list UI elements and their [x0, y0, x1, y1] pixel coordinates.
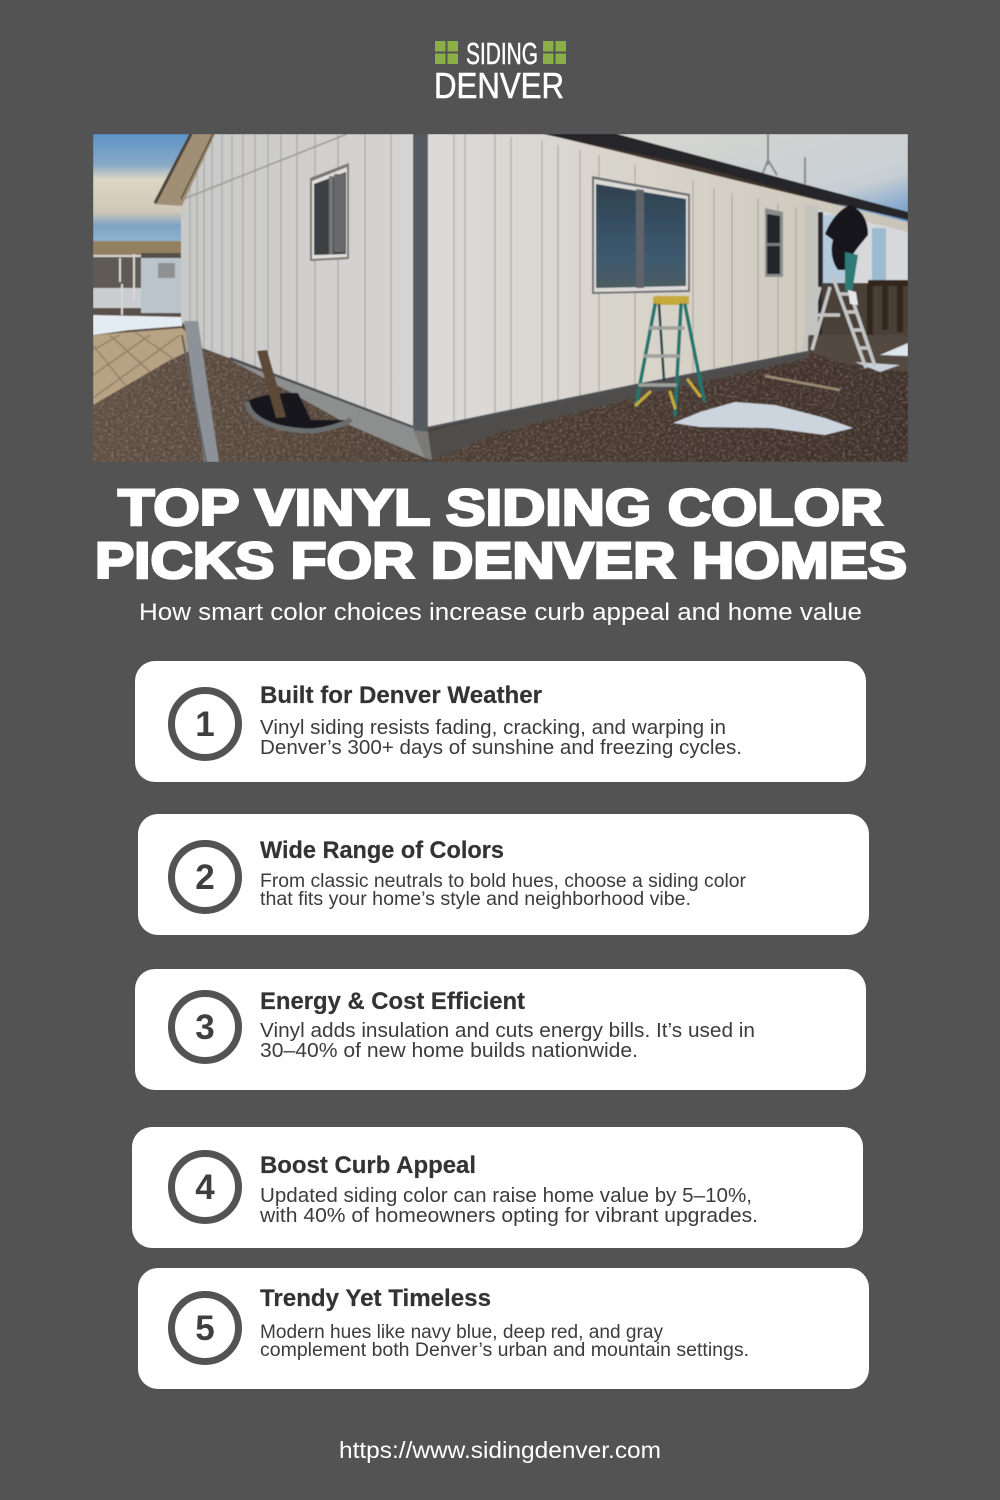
number badge 1: 1 — [195, 705, 215, 744]
antenna and pole — [762, 134, 805, 184]
heading: Energy & Cost Efficient — [260, 988, 525, 1015]
deck — [822, 283, 908, 335]
body text — [259, 1185, 758, 1227]
icon: left green window — [435, 41, 458, 64]
wooden stake — [257, 350, 286, 418]
left wall — [181, 134, 413, 427]
body text — [260, 871, 747, 910]
heading: Wide Range of Colors — [260, 837, 504, 864]
heading: Boost Curb Appeal — [260, 1152, 476, 1179]
body text: Denver’s 300+ days of sunshine and freezing cycles. — [260, 737, 742, 759]
panel: built for Denver weather — [135, 661, 866, 782]
heading: Trendy Yet Timeless — [260, 1285, 491, 1312]
logo — [434, 36, 566, 106]
body text: with 40% of homeowners opting for vibrant upgrades. — [259, 1205, 758, 1227]
title — [95, 479, 907, 589]
distant field — [93, 241, 183, 255]
window well — [247, 393, 350, 431]
body text: Modern hues like navy blue, deep red, and gray — [260, 1322, 663, 1343]
heading: Built for Denver Weather — [260, 682, 542, 709]
fence and shed — [93, 253, 142, 316]
number badge 3: 3 — [195, 1008, 215, 1047]
snow — [93, 315, 182, 335]
back yard ground — [808, 335, 908, 372]
aluminium ladder — [803, 275, 875, 368]
icon: right green window — [543, 41, 566, 64]
number badge 5: 5 — [195, 1309, 215, 1348]
panel: trendy yet timeless — [138, 1268, 869, 1389]
body text — [260, 1020, 755, 1062]
body text: that fits your home’s style and neighborhood vibe. — [260, 889, 691, 910]
logo word: denver: DENVER — [434, 65, 564, 106]
snow patch — [673, 402, 853, 435]
number badge 4: 4 — [195, 1168, 215, 1207]
body text — [260, 1322, 749, 1361]
number badge 1 — [172, 690, 238, 758]
gable roof — [154, 134, 215, 206]
left sky — [93, 134, 193, 242]
number badge 4 — [172, 1154, 238, 1220]
corner trim — [413, 134, 428, 433]
large window — [592, 176, 690, 294]
number badge 5 — [172, 1294, 238, 1362]
body text: Updated siding color can raise home value by 5–10%, — [260, 1185, 752, 1207]
title: TOP VINYL SIDING COLOR — [118, 479, 883, 536]
number badge 2: 2 — [195, 858, 215, 897]
panel: boost curb appeal — [132, 1127, 863, 1248]
body text: 30–40% of new home builds nationwide. — [260, 1040, 638, 1062]
body text — [260, 717, 742, 759]
right sky — [600, 134, 908, 225]
right wall seams — [454, 134, 796, 421]
left wall seams — [190, 134, 391, 419]
logo word: siding: SIDING — [466, 36, 538, 71]
house end and doorway — [818, 210, 908, 284]
right wall — [428, 134, 908, 427]
body text: From classic neutrals to bold hues, choose a siding color — [260, 871, 747, 892]
body text: complement both Denver’s urban and mountain settings. — [260, 1340, 749, 1361]
green step ladder — [636, 296, 704, 415]
gate post — [184, 321, 219, 462]
subtitle: How smart color choices increase curb appeal and home value — [139, 599, 862, 626]
sunlit ground with fence mesh — [93, 328, 200, 405]
fascia — [543, 134, 908, 220]
small window — [310, 163, 349, 261]
ground grain — [93, 340, 908, 462]
number badge 3 — [172, 994, 238, 1060]
website url: https://www.sidingdenver.com — [339, 1437, 661, 1463]
narrow window — [765, 208, 783, 277]
number badge 2 — [172, 844, 238, 910]
board on ground — [765, 376, 840, 390]
title: PICKS FOR DENVER HOMES — [95, 532, 907, 589]
panel: wide range of colors — [138, 814, 869, 935]
foundation — [230, 360, 425, 458]
worker — [825, 205, 868, 270]
body text: Vinyl adds insulation and cuts energy bills. It’s used in — [260, 1020, 755, 1042]
panel: energy and cost efficient — [135, 969, 866, 1090]
gable trim line — [181, 134, 347, 200]
photo: house with new siding — [93, 134, 908, 462]
body text: Vinyl siding resists fading, cracking, and warping in — [260, 717, 726, 739]
